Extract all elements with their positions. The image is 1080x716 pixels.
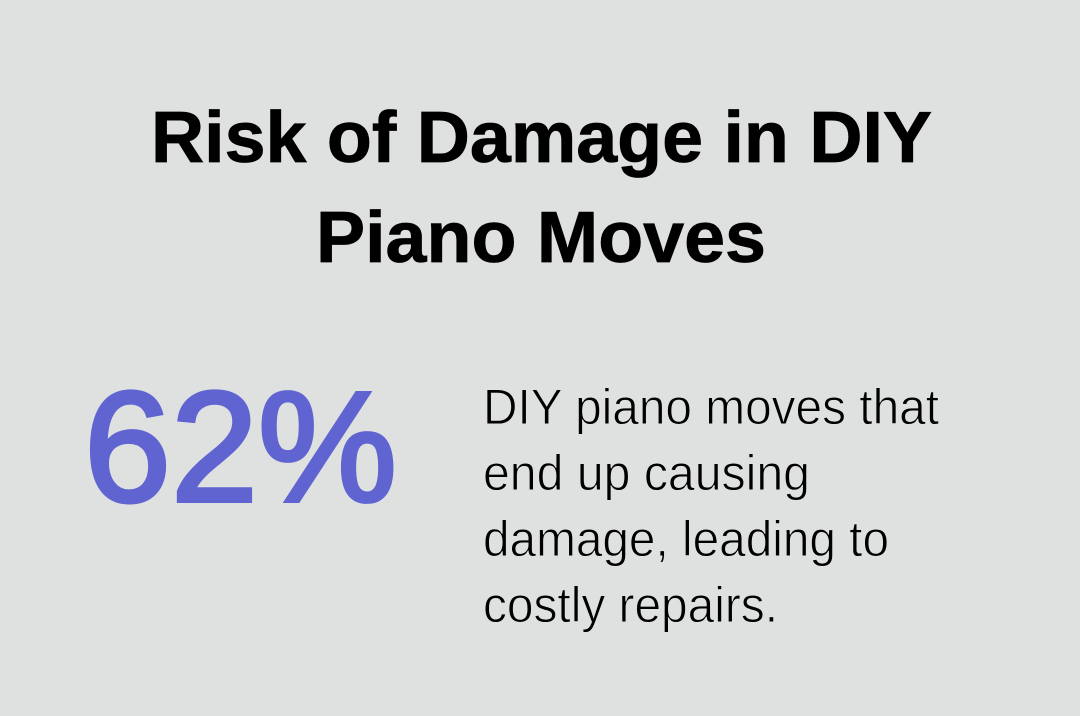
statistic: 62%: 62% xyxy=(84,360,397,535)
description text xyxy=(483,379,939,633)
title: Risk of Damage in DIY xyxy=(151,98,932,178)
description text: damage, leading to xyxy=(483,511,889,567)
description text: costly repairs. xyxy=(483,577,778,633)
title xyxy=(151,98,932,278)
description text: end up causing xyxy=(483,445,810,501)
title: Piano Moves xyxy=(316,198,766,278)
description text: DIY piano moves that xyxy=(483,379,939,435)
